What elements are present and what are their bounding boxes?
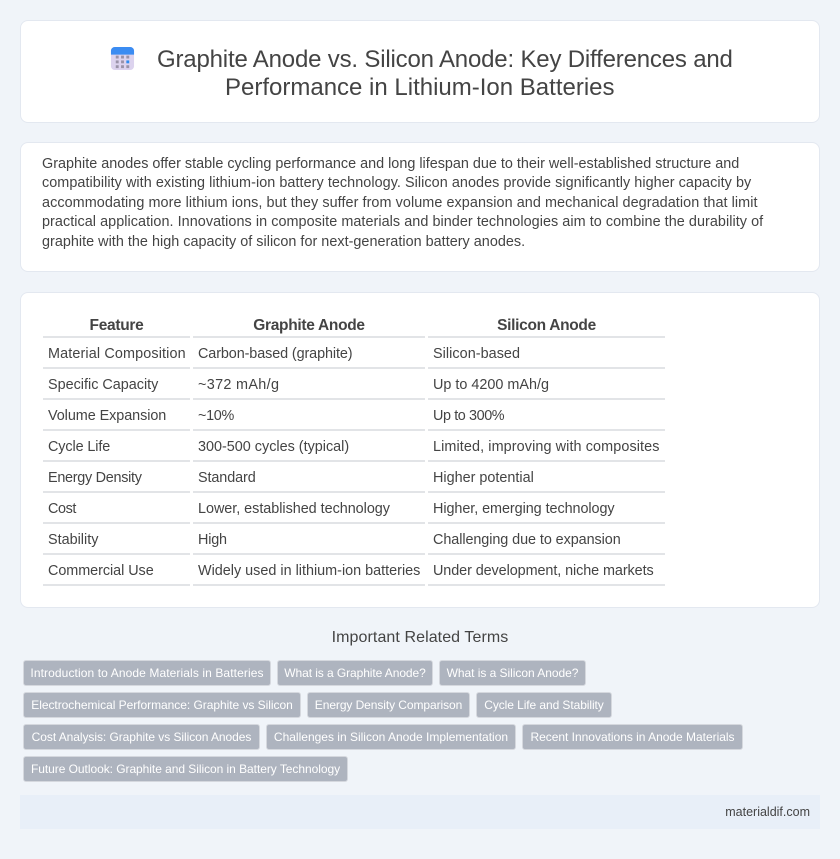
table row: Specific Capacity: ~372 mAh/g: [198, 377, 279, 393]
heading: Important Related Terms: Important Related Terms: [332, 629, 508, 646]
tag: Future Outlook: Graphite and Silicon in Battery Technology: [31, 762, 340, 776]
footer text: source: materialdif.com: [725, 805, 810, 819]
panel: title header: [20, 20, 820, 123]
table row: Commercial Use: Under development, niche markets: [433, 563, 654, 579]
table row: Material Composition: [48, 346, 520, 362]
table row: Commercial Use: [48, 563, 654, 579]
table row: Cost: [48, 501, 615, 517]
table row: Stability: Stability: [48, 532, 98, 548]
table row: Energy Density: [48, 470, 534, 486]
table row: Cycle Life: [48, 439, 660, 455]
text block: summary paragraph: practical application. Innovations in composite materials and binder technologies aim to combine the durability of: [42, 214, 763, 230]
table row: Specific Capacity: Up to 4200 mAh/g: [433, 377, 549, 393]
tag: Cycle Life and Stability: [484, 698, 604, 712]
table row: Energy Density: Standard: [198, 470, 256, 486]
icon: calendar: [110, 47, 134, 70]
tag: What is a Silicon Anode?: [447, 666, 578, 680]
table header: Feature: Feature: [90, 317, 143, 334]
heading: main title: Graphite Anode vs. Silicon Anode: Key Differences and: [157, 46, 733, 73]
tag: Introduction to Anode Materials in Batteries: [30, 666, 264, 680]
table row: Cycle Life: Limited, improving with composites: [433, 439, 660, 455]
table row: Material Composition: Silicon-based: [433, 346, 520, 362]
table row: Specific Capacity: [48, 377, 549, 393]
table row: Stability: Challenging due to expansion: [433, 532, 621, 548]
table row: Energy Density: Higher potential: [433, 470, 534, 486]
table row: Cost: Lower, established technology: [198, 501, 390, 517]
text block: summary paragraph: graphite with the high capacity of silicon for next-generation battery anodes.: [42, 234, 525, 250]
table row: Volume Expansion: Up to 300%: [433, 408, 504, 424]
panel: summary: [20, 142, 820, 272]
tag: [522, 724, 743, 750]
table row: Material Composition: Carbon-based (graphite): [198, 346, 352, 362]
tag: Recent Innovations in Anode Materials: [530, 730, 735, 744]
tag: [439, 660, 586, 686]
tag: Cost Analysis: Graphite vs Silicon Anodes: [32, 730, 251, 744]
tag: What is a Graphite Anode?: [284, 666, 426, 680]
table row: Commercial Use: Commercial Use: [48, 563, 154, 579]
tag: [307, 692, 470, 718]
tag: Energy Density Comparison: [315, 698, 462, 712]
table row: Commercial Use: Widely used in lithium-ion batteries: [198, 563, 420, 579]
heading: main title: Performance in Lithium-Ion Batteries: [225, 74, 615, 101]
table row: Cycle Life: 300-500 cycles (typical): [198, 439, 349, 455]
text block: summary paragraph: compatibility with existing lithium-ion battery technology. Silicon anodes provide significantly higher capacity by: [42, 175, 751, 191]
table row: Cost: Cost: [48, 501, 76, 517]
footer bar: [20, 795, 820, 829]
tag: [266, 724, 516, 750]
table row: Energy Density: Energy Density: [48, 470, 142, 486]
table row: Cost: Higher, emerging technology: [433, 501, 615, 517]
table header: Silicon Anode: Silicon Anode: [497, 317, 596, 334]
text block: summary paragraph: [42, 156, 764, 250]
tag: [23, 756, 348, 782]
tag: Electrochemical Performance: Graphite vs Silicon: [31, 698, 293, 712]
tag: [476, 692, 612, 718]
table row: Stability: [48, 532, 621, 548]
table row: Cycle Life: Cycle Life: [48, 439, 110, 455]
table row: Stability: High: [198, 532, 227, 548]
table row: Volume Expansion: Volume Expansion: [48, 408, 166, 424]
table row: Volume Expansion: ~10%: [198, 408, 234, 424]
table row: Specific Capacity: Specific Capacity: [48, 377, 158, 393]
tag: Challenges in Silicon Anode Implementation: [274, 730, 508, 744]
heading: main title: [157, 46, 733, 101]
table row: Material Composition: Material Composition: [48, 346, 186, 362]
panel: comparison table: [20, 292, 820, 608]
tag list: related terms: [23, 660, 743, 782]
tag: [23, 692, 301, 718]
tag: [23, 660, 271, 686]
table row: Volume Expansion: [48, 408, 504, 424]
text block: summary paragraph: accommodating more lithium ions, but they suffer from volume expansion and mechanical degradation that limit: [42, 195, 758, 211]
tag: [23, 724, 260, 750]
tag: [277, 660, 433, 686]
table rules: [43, 336, 665, 586]
text block: summary paragraph: Graphite anodes offer stable cycling performance and long lifespan due to their well-established structure and: [42, 156, 739, 172]
table header: Graphite Anode: Graphite Anode: [253, 317, 365, 334]
